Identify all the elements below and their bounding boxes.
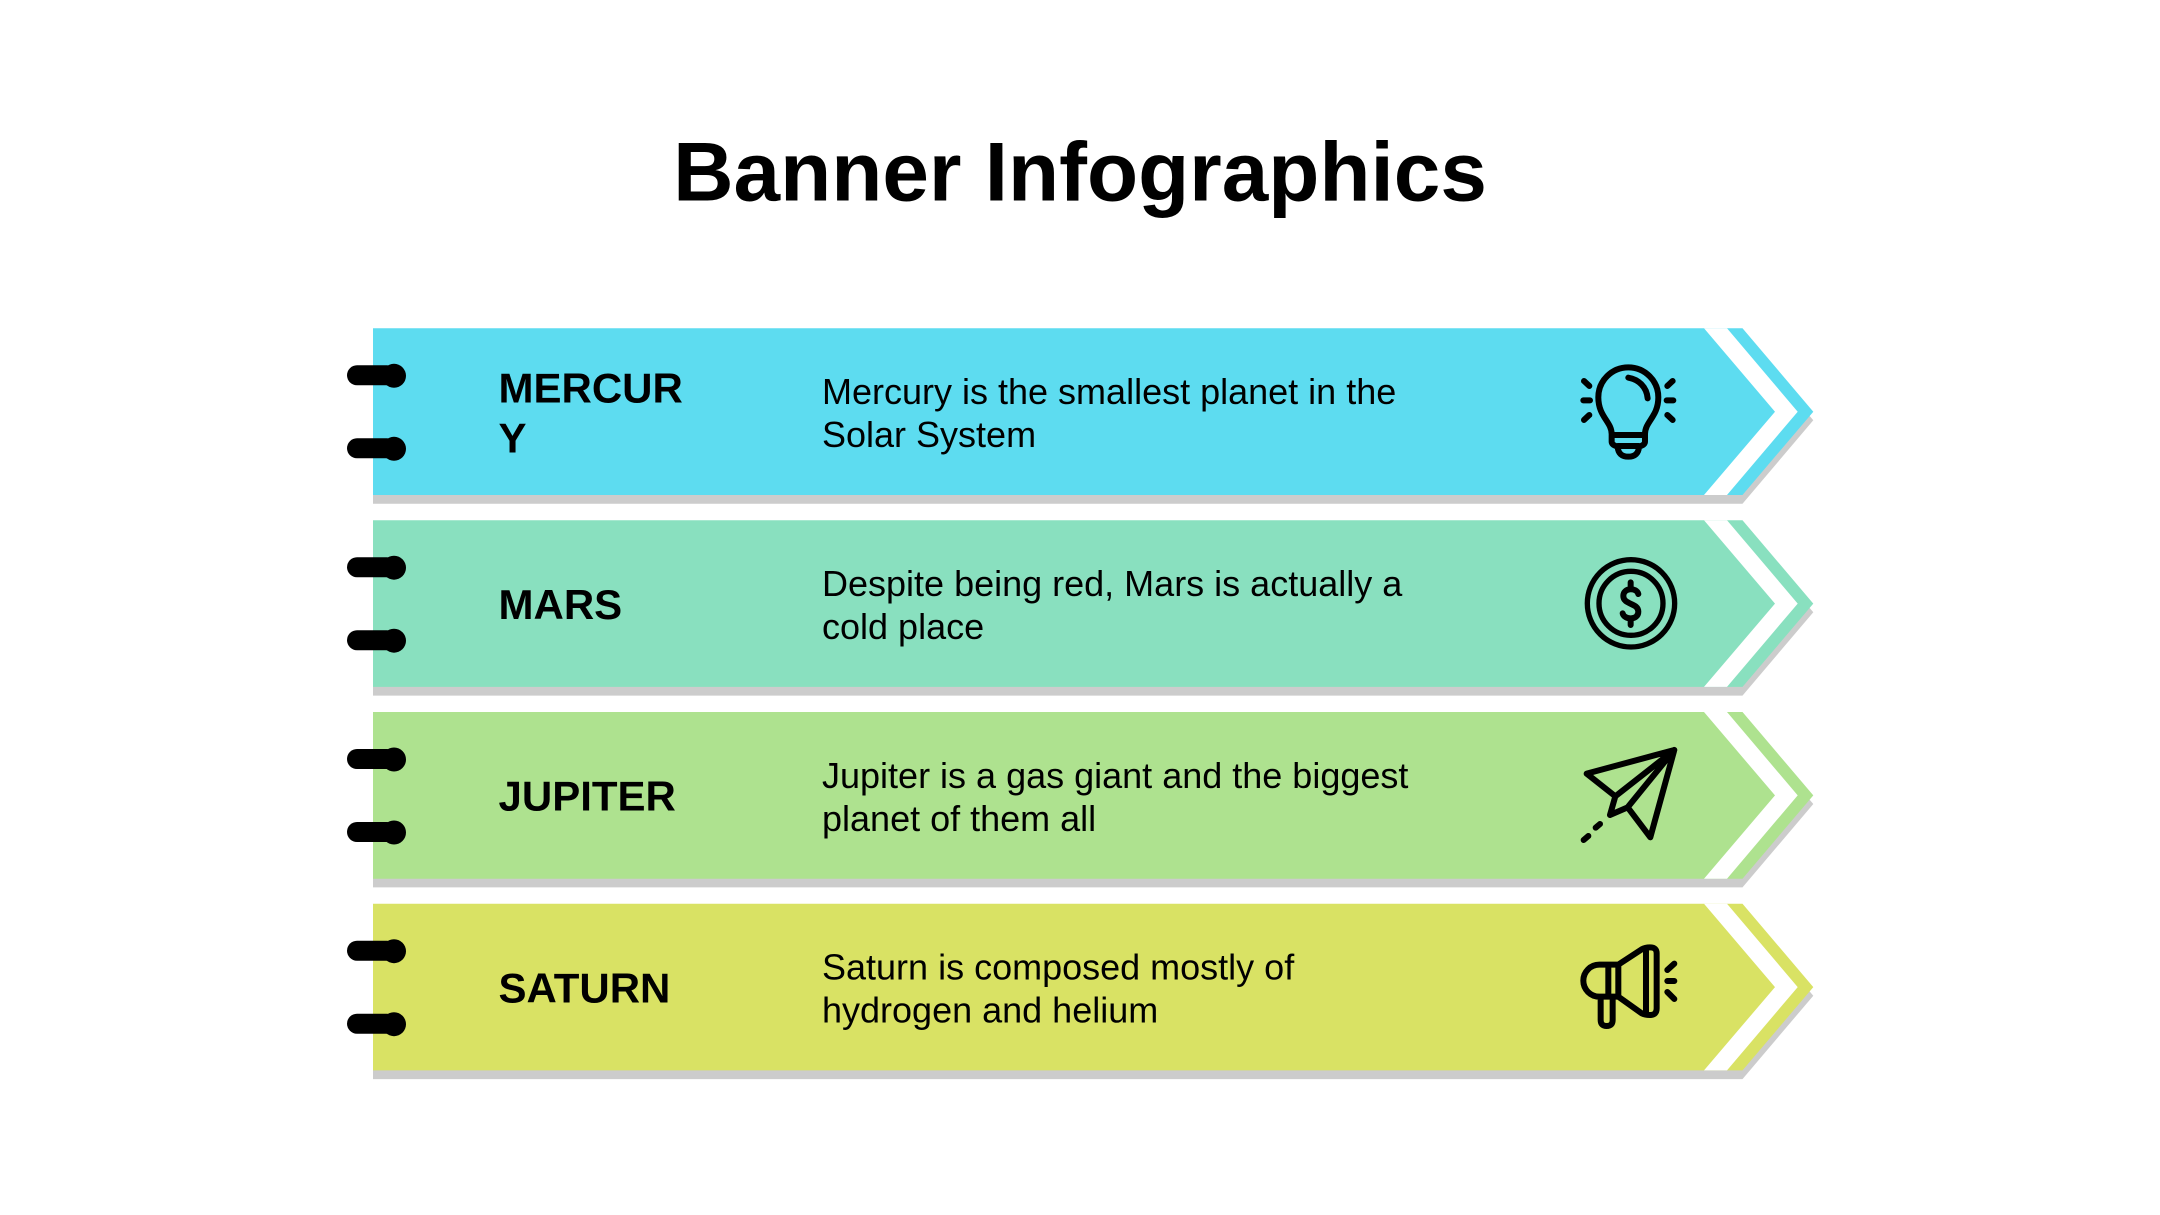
icon: dollar coin xyxy=(1587,560,1675,647)
banner: Jupiter xyxy=(347,712,1813,887)
banner: Mars xyxy=(347,520,1813,696)
description: planet of them all xyxy=(822,798,1096,839)
description: Despite being red, Mars is actually a xyxy=(822,563,1402,604)
description: cold place xyxy=(822,606,984,647)
banner shadow xyxy=(373,337,1813,504)
chevron gap xyxy=(1704,712,1798,879)
label: SATURN xyxy=(498,964,670,1011)
chevron gap xyxy=(1704,904,1798,1070)
label: MARS xyxy=(498,581,622,628)
label: Y xyxy=(498,415,527,462)
binder pegs xyxy=(347,748,406,844)
icon: light bulb xyxy=(1583,367,1673,457)
title: Banner Infographics xyxy=(673,124,1487,218)
description: Mercury is the smallest planet in the xyxy=(822,371,1396,412)
icon: paper plane xyxy=(1584,750,1674,840)
label: JUPITER xyxy=(498,773,676,820)
description: Jupiter is a gas giant and the biggest xyxy=(822,755,1408,796)
description: Solar System xyxy=(822,414,1036,455)
banner shadow xyxy=(373,529,1813,696)
description: Saturn is composed mostly of xyxy=(822,946,1294,988)
chevron gap xyxy=(1704,520,1798,687)
label: MERCUR xyxy=(498,365,683,412)
binder pegs xyxy=(347,939,406,1036)
binder pegs xyxy=(347,556,406,653)
banner arrow xyxy=(373,520,1813,687)
banner: Saturn xyxy=(347,904,1813,1079)
banner arrow xyxy=(373,712,1813,879)
banner arrow xyxy=(373,904,1813,1070)
binder pegs xyxy=(347,364,406,461)
banner arrow xyxy=(373,328,1813,495)
banner shadow xyxy=(373,721,1813,887)
icon: megaphone xyxy=(1583,947,1674,1026)
banner: Mercury xyxy=(347,328,1813,504)
description: hydrogen and helium xyxy=(822,990,1158,1031)
banner shadow xyxy=(373,912,1813,1079)
chevron gap xyxy=(1704,328,1798,495)
